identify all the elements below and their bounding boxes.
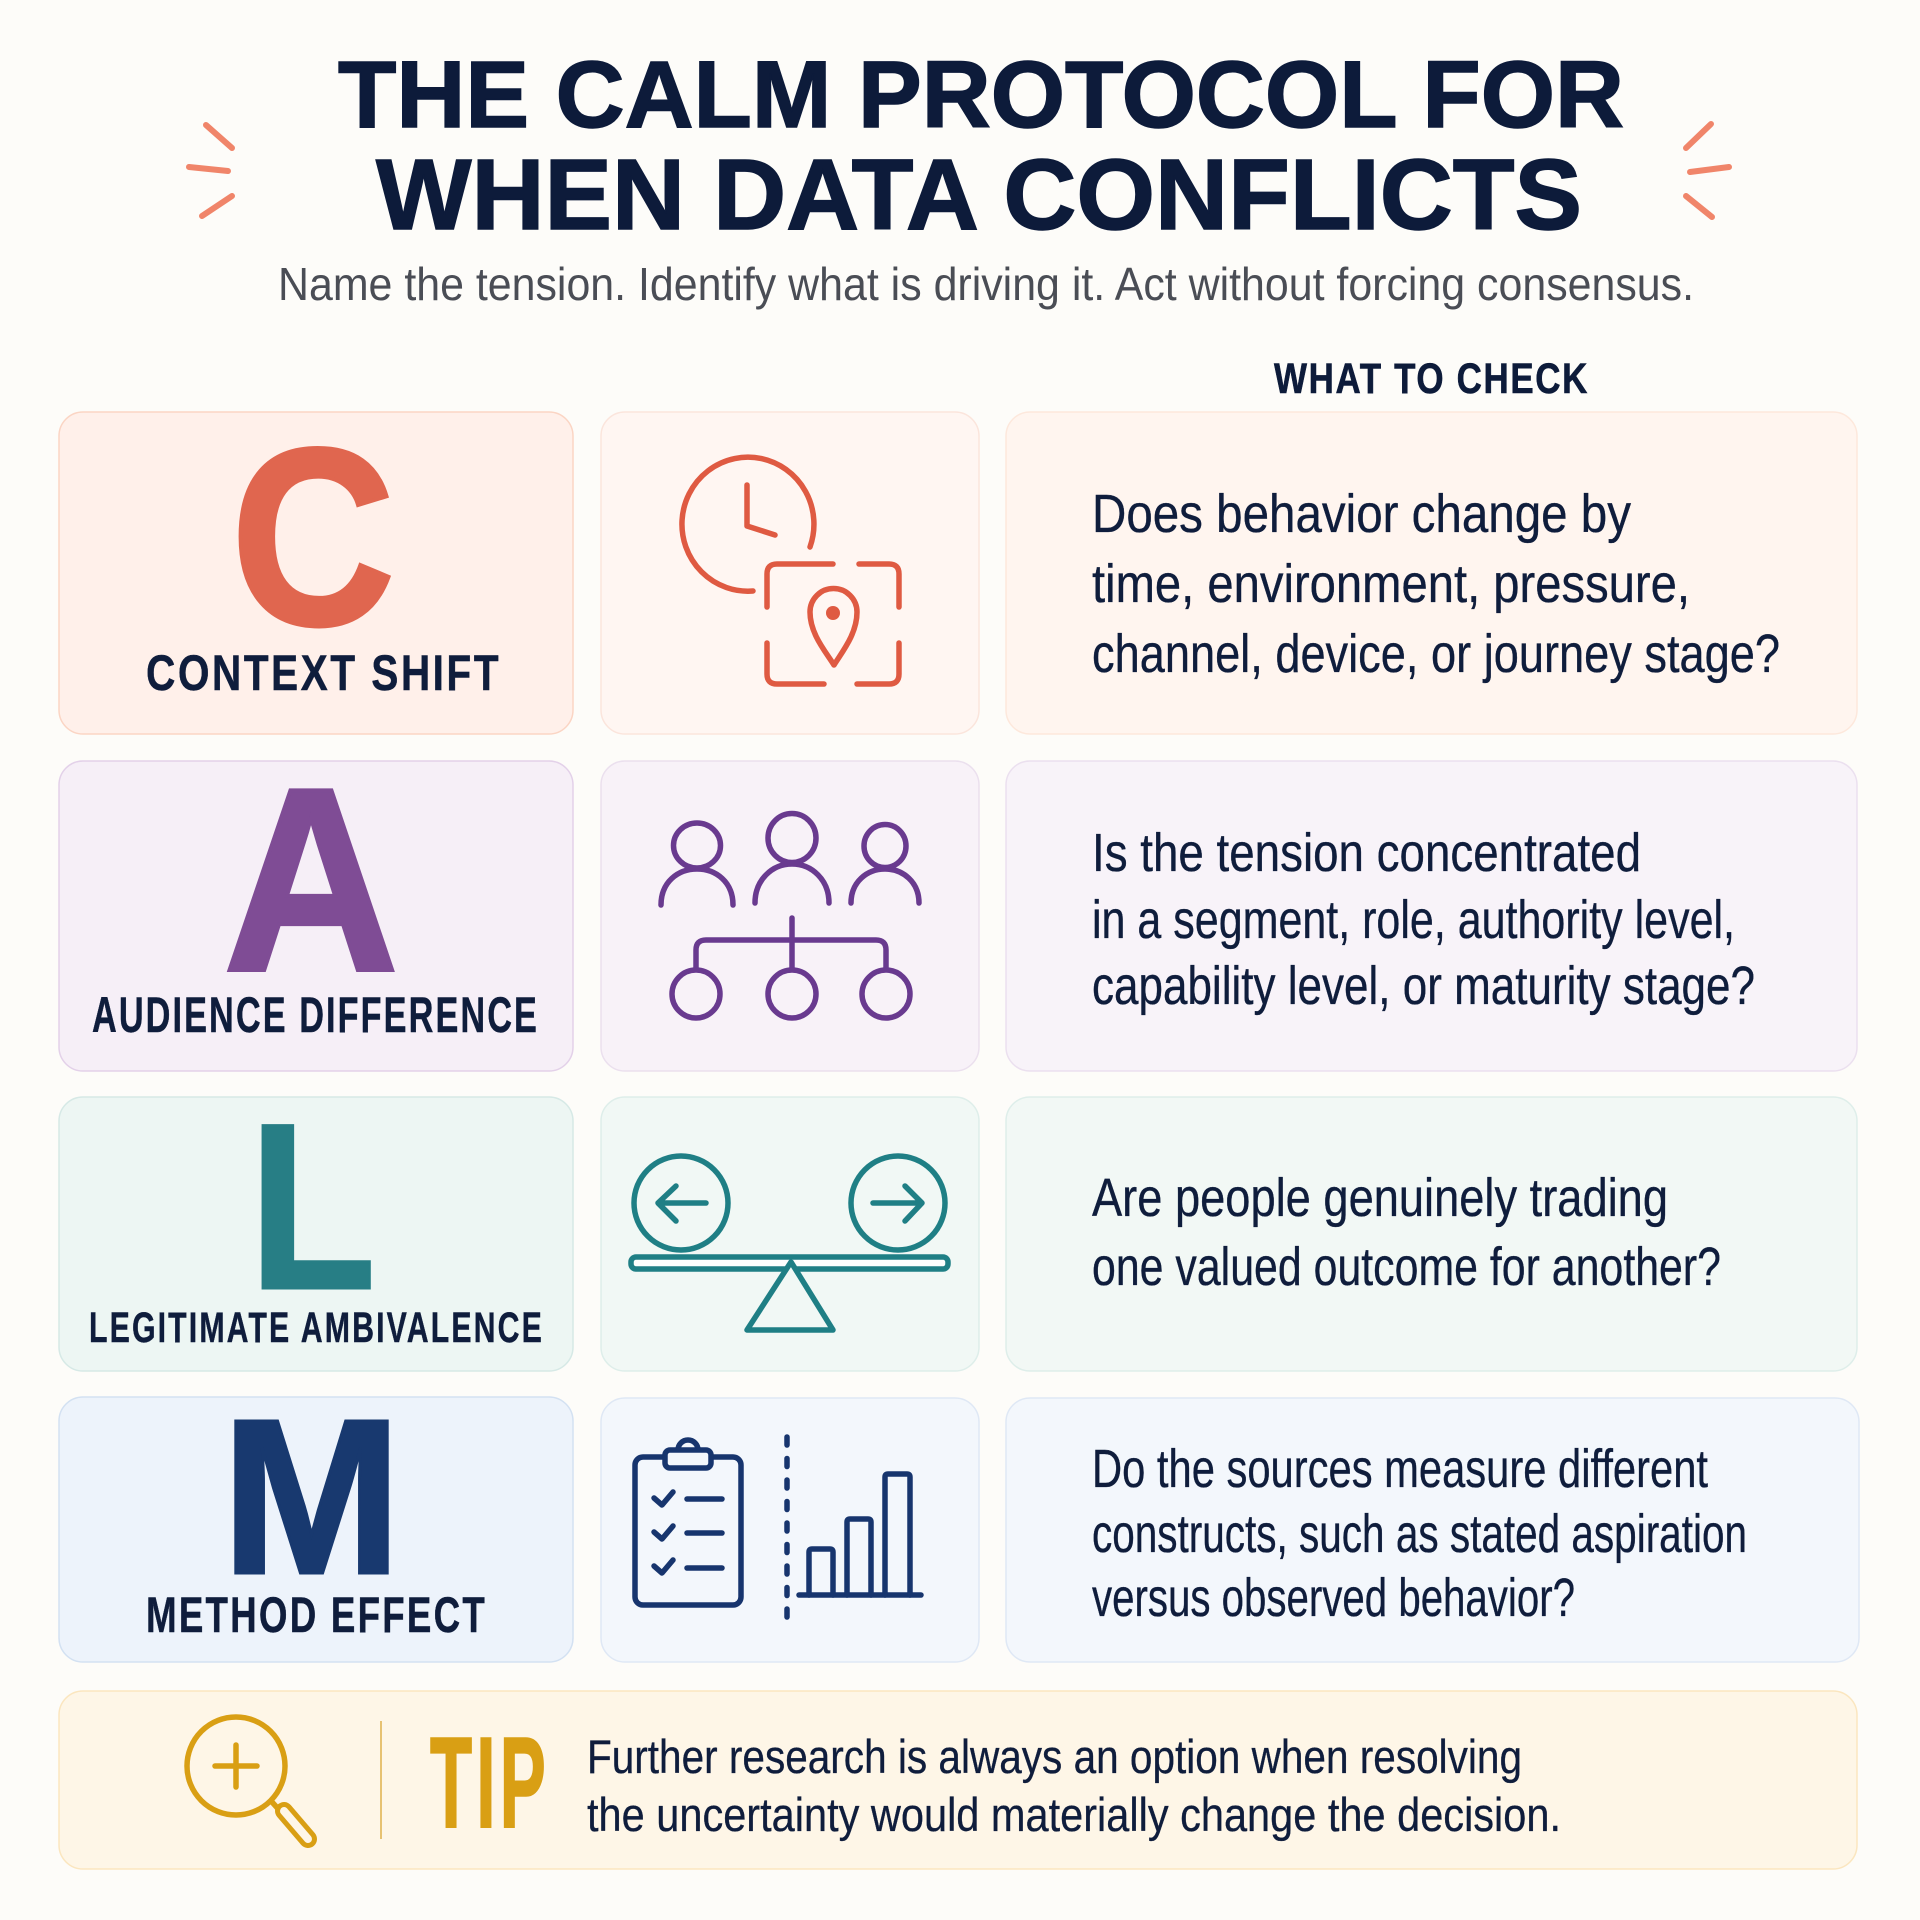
decorative accent: right sparks — [1686, 124, 1729, 217]
question text — [1092, 1168, 1721, 1297]
panel: context question — [1006, 412, 1857, 734]
label: audience difference: AUDIENCE DIFFERENCE — [92, 987, 539, 1043]
divider — [380, 1721, 382, 1839]
question text: Do the sources measure different — [1092, 1439, 1708, 1499]
letter L: L — [249, 1076, 376, 1339]
panel: tip callout — [59, 1691, 1857, 1869]
label: context shift: CONTEXT SHIFT — [146, 645, 501, 701]
question text: versus observed behavior? — [1092, 1568, 1575, 1628]
label: method effect: METHOD EFFECT — [146, 1587, 487, 1643]
panel: audience icon — [601, 761, 979, 1071]
question text — [1092, 823, 1755, 1016]
panel: method icon — [601, 1398, 979, 1662]
decorative accent: left sparks — [189, 125, 232, 216]
panel: L letter — [59, 1076, 573, 1371]
question text: Is the tension concentrated — [1092, 823, 1641, 883]
question text: in a segment, role, authority level, — [1092, 890, 1735, 950]
panel: ambivalence question — [1006, 1097, 1857, 1371]
panel: method question — [1006, 1398, 1859, 1662]
question text: time, environment, pressure, — [1092, 554, 1690, 614]
title: THE CALM PROTOCOL FOR — [338, 42, 1624, 148]
letter M: M — [221, 1374, 402, 1620]
panel: M letter — [59, 1374, 573, 1662]
letter C: C — [231, 396, 395, 678]
icon: clock and location frame — [682, 457, 899, 684]
icon: magnifying glass — [187, 1717, 308, 1839]
title — [338, 42, 1624, 251]
panel: ambivalence icon — [601, 1097, 979, 1371]
question text: channel, device, or journey stage? — [1092, 624, 1780, 684]
icon: clipboard and bar chart — [635, 1437, 921, 1624]
question text — [1092, 1439, 1747, 1628]
panel: context icon — [601, 412, 979, 734]
tip text: Further research is always an option when resolving — [587, 1730, 1522, 1783]
panel: A letter — [59, 735, 573, 1071]
title: WHEN DATA CONFLICTS — [376, 139, 1582, 251]
panel: C letter — [59, 396, 573, 734]
question text: one valued outcome for another? — [1092, 1237, 1721, 1297]
letter A: A — [223, 735, 399, 1026]
tip text: the uncertainty would materially change the decision. — [587, 1788, 1561, 1841]
icon: people and hierarchy — [661, 814, 919, 1018]
label: legitimate ambivalence: LEGITIMATE AMBIVALENCE — [89, 1304, 544, 1352]
tip text — [587, 1730, 1561, 1841]
question text: Are people genuinely trading — [1092, 1168, 1668, 1228]
question text: Does behavior change by — [1092, 484, 1631, 544]
column heading: what to check: WHAT TO CHECK — [1274, 355, 1589, 403]
icon: balance scale with arrows — [631, 1156, 948, 1330]
label: tip: TIP — [430, 1711, 550, 1855]
panel: audience question — [1006, 761, 1857, 1071]
question text: capability level, or maturity stage? — [1092, 956, 1755, 1016]
subtitle: Name the tension. Identify what is driving it. Act without forcing consensus. — [278, 258, 1694, 310]
question text — [1092, 484, 1780, 684]
